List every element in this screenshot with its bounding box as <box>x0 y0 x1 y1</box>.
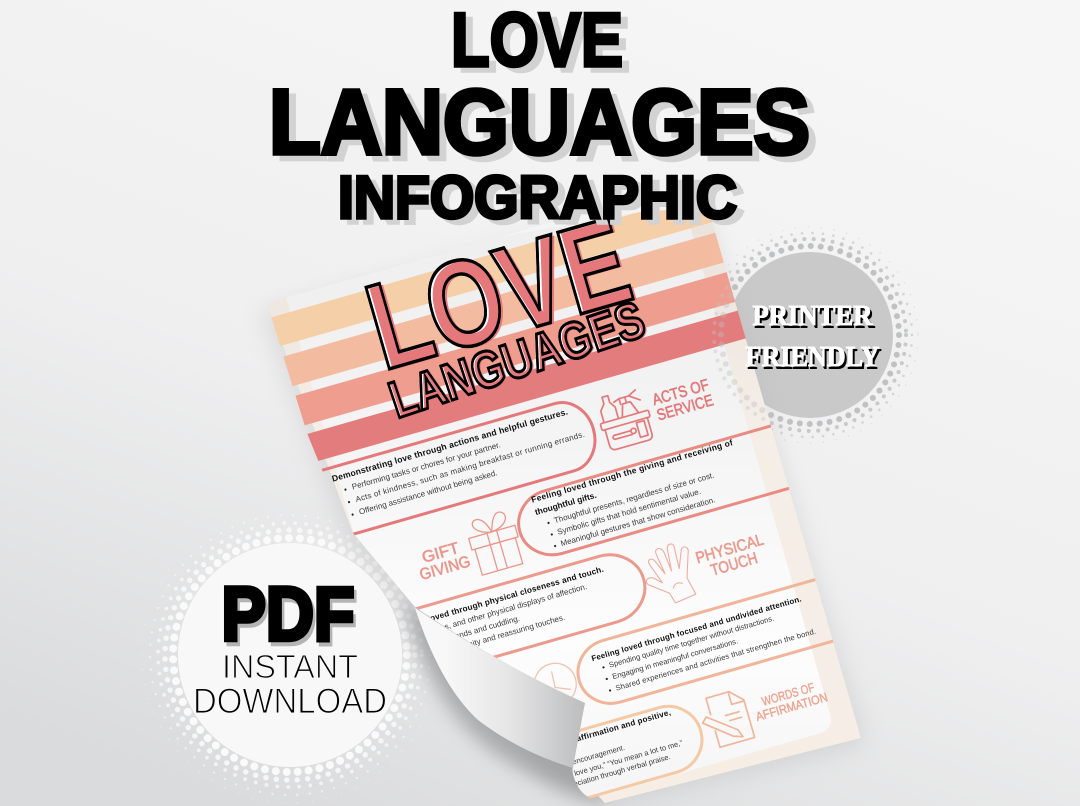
label: acts of service: ACTS OF <box>651 377 711 409</box>
panel: words of affirmation: Expressing appreciation through verbal praise. <box>520 752 672 803</box>
badge text: printer friendly: PRINTER <box>754 302 875 334</box>
panel: quality time <box>534 578 834 705</box>
label: gift giving: GIVING <box>418 553 472 584</box>
badge text: printer friendly: FRIENDLY <box>746 341 880 373</box>
poster title: LOVE <box>364 220 636 371</box>
paper frame <box>267 180 861 803</box>
page curl flap <box>415 608 585 768</box>
panel: acts of service: Demonstrating love through actions and helpful gestures. <box>331 407 569 484</box>
pdf circle badge <box>178 543 402 767</box>
badge text: printer friendly: FRIENDLY <box>748 344 882 376</box>
panel: gift giving: Thoughtful presents, regardless of size or cost. <box>553 471 715 525</box>
panel: acts of service: Offering assistance without being asked. <box>358 468 498 517</box>
icon: cleaning caddy <box>600 389 653 450</box>
main title <box>269 0 817 236</box>
panel: acts of service: Acts of kindness, such as making breakfast or running errands. <box>354 430 586 504</box>
badge text: pdf instant download: PDF <box>224 576 357 661</box>
poster title: LANGUAGES <box>386 302 646 420</box>
title shadow: LOVE <box>458 3 630 88</box>
badge text: pdf instant download <box>193 572 387 721</box>
label: words of affirmation: WORDS OF <box>760 680 816 709</box>
label: gift giving: GIFT <box>420 540 462 567</box>
panel: words of affirmation: Offering words of encouragement. <box>514 743 626 783</box>
paper shadow <box>262 195 866 805</box>
panel: acts of service: Performing tasks or chores for your partner. <box>351 440 502 492</box>
badge text: printer friendly: PRINTER <box>752 300 873 332</box>
badge backing: pdf halftone ring <box>142 507 438 803</box>
icon: gift box <box>468 511 524 576</box>
badge text: pdf instant download: INSTANT <box>222 648 358 685</box>
poster title: LOVE: LOVE <box>353 192 644 397</box>
title shadow <box>276 3 817 236</box>
panel: physical touch: Hugs, kisses, and other physical displays of affection. <box>404 582 588 643</box>
paper sheet <box>268 206 861 803</box>
panel: physical touch: Feeling loved through physical closeness and touch. <box>395 565 605 633</box>
panel: physical touch: Holding hands and cuddling. <box>421 614 521 650</box>
badge text: pdf instant download: PDF <box>222 572 354 657</box>
inner panel <box>281 166 831 806</box>
printer dots over paper <box>714 239 906 431</box>
panel: gift giving: Symbolic gifts that hold sentimental value. <box>556 487 702 537</box>
badge backing: printer friendly <box>702 227 918 443</box>
poster title: LOVE: LOVE <box>356 193 648 398</box>
panel: quality time: Shared experiences and activities that strengthen the bond. <box>614 627 817 693</box>
panel: quality time: Feeling loved through focused and undivided attention. <box>590 594 802 663</box>
icon: paper and pen <box>702 690 756 748</box>
poster title: LANGUAGES: LANGUAGES <box>385 292 654 431</box>
label: gift giving <box>420 542 470 580</box>
title shadow: INFOGRAPHIC <box>345 169 744 236</box>
panel: words of affirmation: Feeling loved through verbal affirmation and positive, <box>462 708 672 776</box>
panel: gift giving: Meaningful gestures that show consideration. <box>560 495 716 548</box>
label: physical touch: TOUCH <box>709 550 760 580</box>
label: acts of service: SERVICE <box>655 392 715 424</box>
panel: words of affirmation: Saying phrases like “I love you,” “You mean a lot to me,” <box>502 738 684 798</box>
panel: physical touch <box>416 534 764 658</box>
label: physical touch <box>695 534 764 576</box>
panel: gift giving <box>420 424 790 580</box>
poster title: LOVE LANGUAGES <box>364 220 646 420</box>
icon: open hand <box>646 543 696 604</box>
panel: gift giving: Feeling loved through the giving and receiving of <box>530 437 734 505</box>
panel: physical touch: Physical proximity and reassuring touches. <box>418 613 566 663</box>
header stripes <box>272 210 746 461</box>
title: love: LOVE <box>451 0 623 83</box>
curl shadow <box>405 600 605 805</box>
title shadow: LANGUAGES <box>276 77 817 179</box>
panel: words of affirmation <box>574 682 828 798</box>
title: languages: LANGUAGES <box>269 72 810 174</box>
panel: gift giving: thoughtful gifts. <box>534 490 598 517</box>
badge text: pdf instant download: DOWNLOAD <box>193 682 387 721</box>
poster title: LANGUAGES: LANGUAGES <box>382 291 652 430</box>
panel: acts of service <box>322 378 714 536</box>
label: acts of service <box>654 378 714 420</box>
badge text: printer friendly <box>746 300 882 376</box>
poster title: LOVE: LOVE <box>353 192 644 397</box>
label: words of affirmation: AFFIRMATION <box>754 690 829 724</box>
icon: clock <box>534 662 577 697</box>
panel: quality time: Engaging in meaningful conversations. <box>611 636 739 681</box>
title: infographic: INFOGRAPHIC <box>338 164 737 231</box>
poster title: LANGUAGES: LANGUAGES <box>382 291 652 430</box>
label: physical touch: PHYSICAL <box>694 532 766 567</box>
panel: quality time: Spending quality time together without distractions. <box>608 614 775 670</box>
top fade over paper <box>635 207 666 213</box>
